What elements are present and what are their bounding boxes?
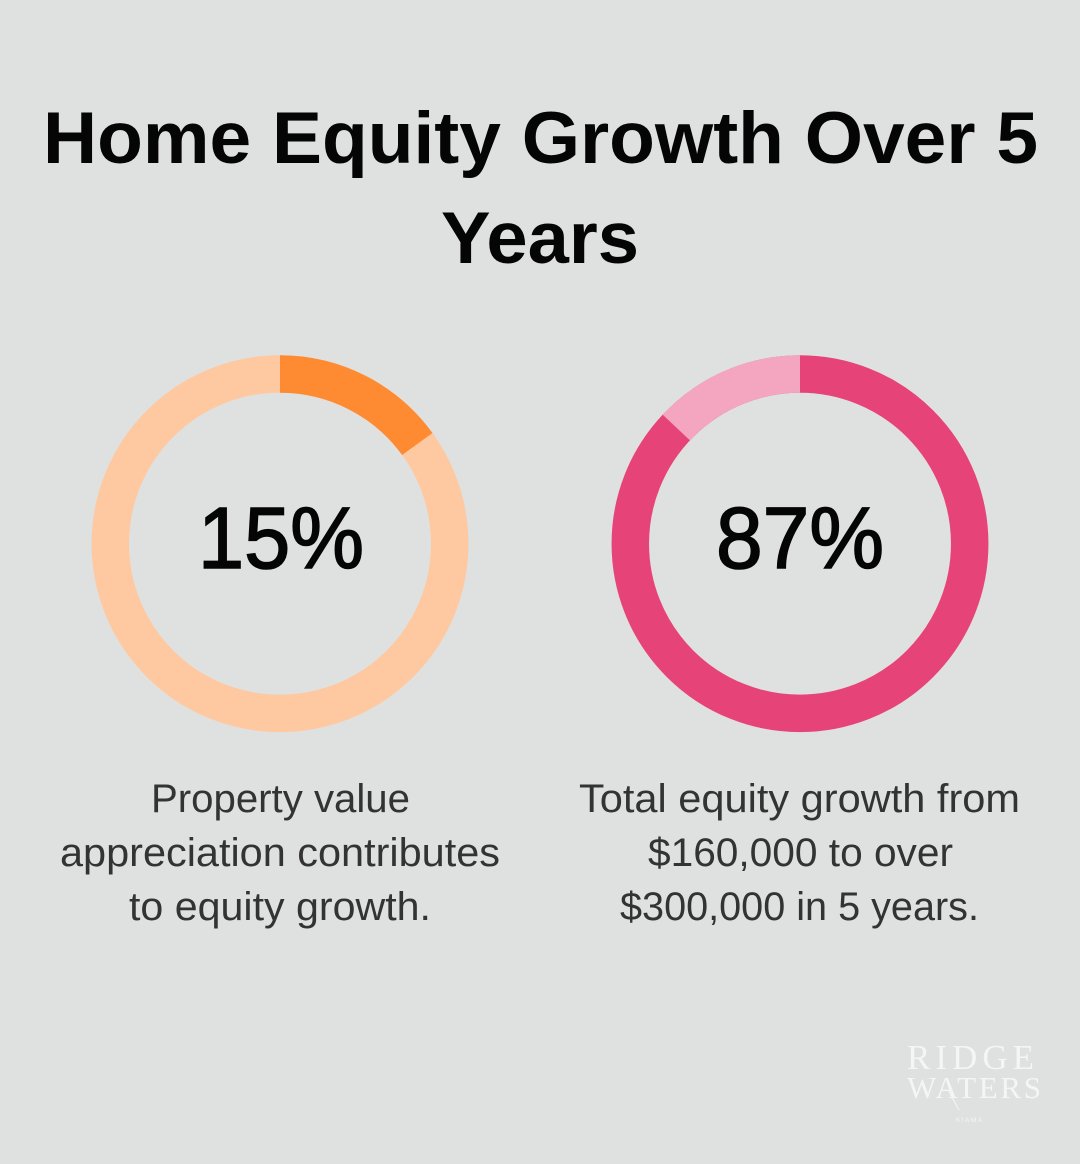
description: property value: to equity growth.	[129, 885, 431, 929]
description: property value: Property value	[151, 777, 410, 821]
donut chart: 15%	[110, 374, 450, 713]
logo: Ridge Waters Kiama: KIAMA	[956, 1117, 983, 1124]
description: property value	[60, 777, 500, 929]
logo: Ridge Waters Kiama: RIDGE	[907, 1038, 1034, 1077]
description: total equity: $160,000 to over	[648, 831, 953, 875]
panel: property value appreciation	[60, 374, 500, 929]
statistic: 15%: 15%	[198, 490, 364, 587]
donut chart: 87%	[630, 374, 970, 713]
statistic: 87%: 87%	[716, 490, 884, 587]
title	[43, 98, 1038, 279]
title: Years	[441, 198, 639, 279]
description: property value: appreciation contributes	[60, 831, 500, 875]
logo: Ridge Waters Kiama: WATERS	[907, 1070, 1041, 1105]
description: total equity: $300,000 in 5 years.	[620, 885, 979, 929]
description: total equity: Total equity growth from	[579, 777, 1020, 821]
description: total equity	[579, 777, 1020, 929]
title: Home Equity Growth Over 5	[43, 98, 1038, 179]
logo: Ridge Waters Kiama	[907, 1038, 1041, 1124]
panel: total equity growth	[579, 374, 1020, 929]
